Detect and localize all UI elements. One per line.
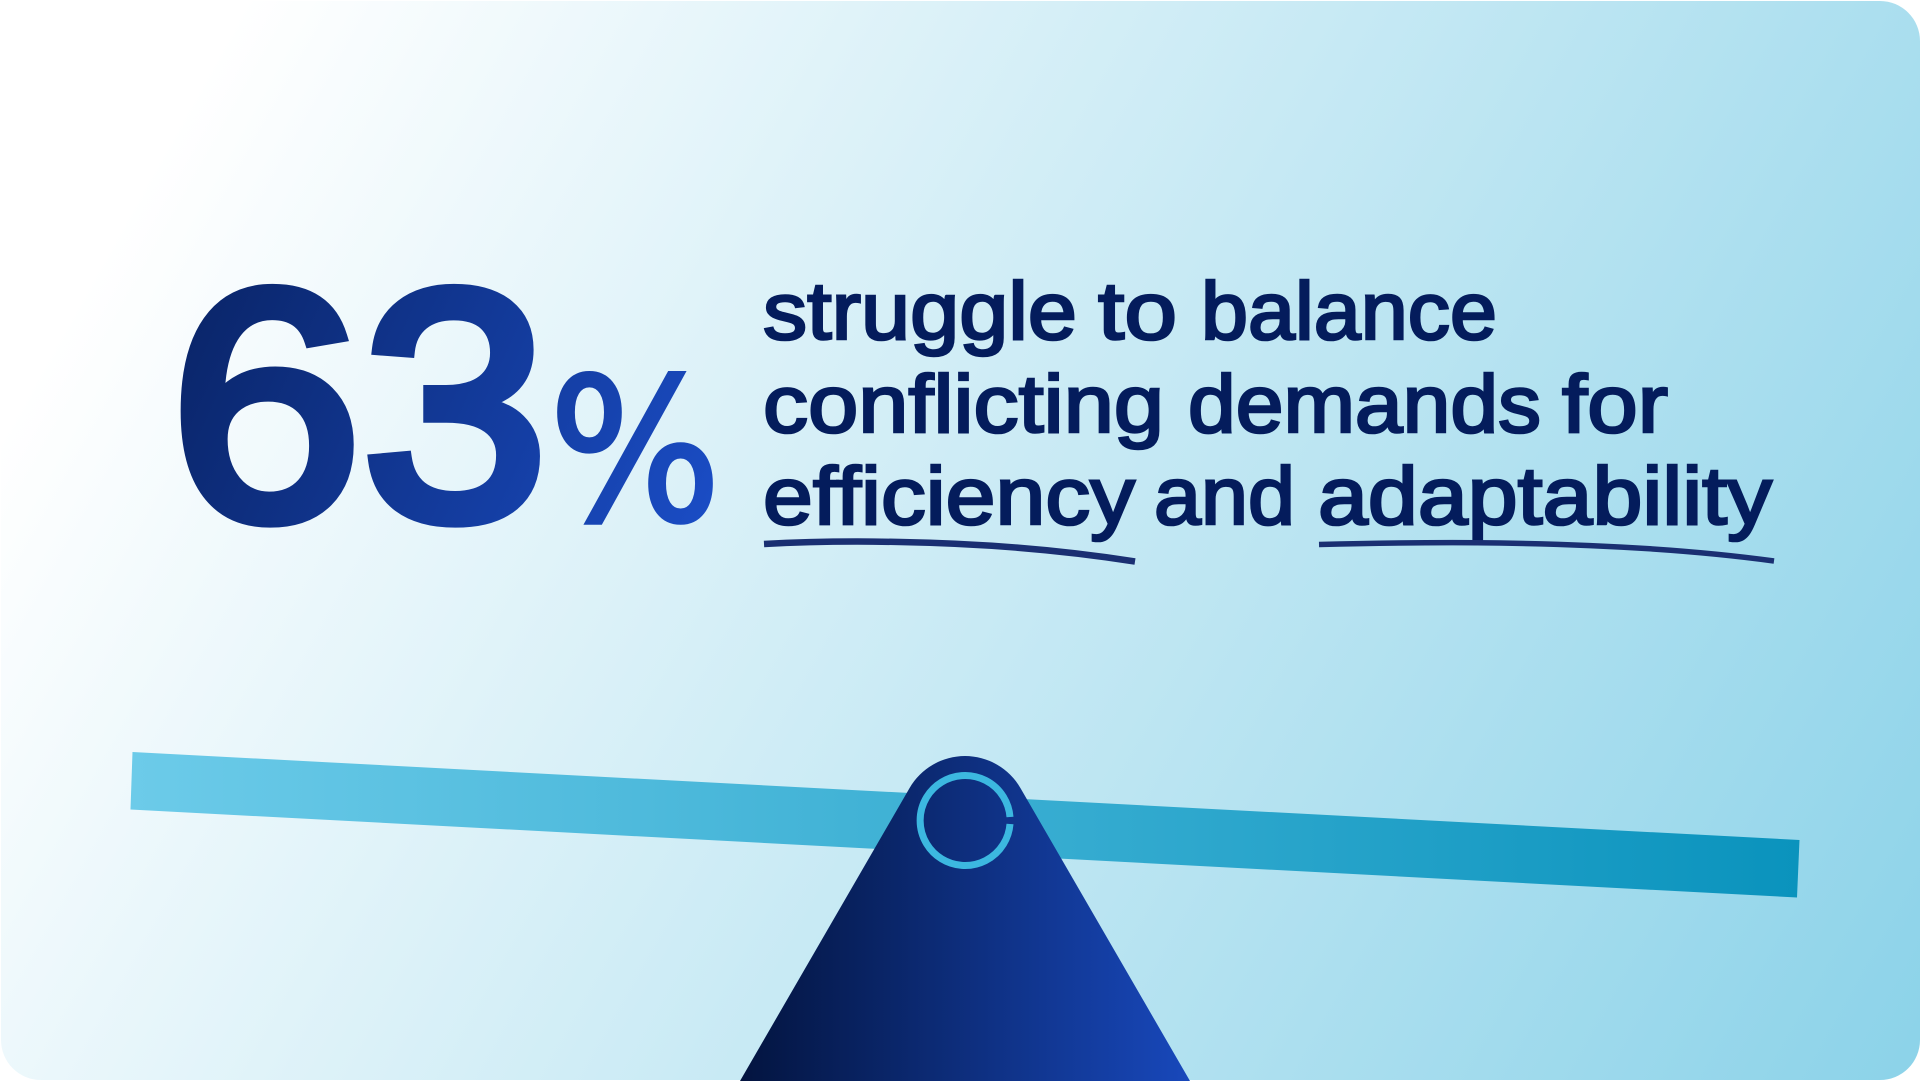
fulcrum: [740, 756, 1190, 1081]
headline text: efficiency: [763, 451, 1135, 542]
statistic: 63%: [170, 224, 721, 588]
seesaw: [130, 752, 1800, 1081]
headline text: and: [1154, 451, 1295, 542]
underline: efficiency: [764, 542, 1135, 562]
headline text: adaptability: [1318, 451, 1772, 542]
headline text: struggle: [763, 266, 1077, 357]
headline text: [763, 266, 1772, 542]
statistic: 63%: 3: [362, 224, 548, 588]
statistic: 63%: 6: [170, 224, 362, 588]
headline text: for: [1562, 359, 1668, 450]
statistic: 63%: %: [549, 336, 721, 567]
headline text: demands: [1188, 359, 1541, 450]
pivot ring: [920, 776, 1010, 866]
headline text: to: [1098, 266, 1177, 357]
headline text: balance: [1201, 266, 1497, 357]
seesaw beam: [130, 752, 1800, 898]
underline: adaptability: [1319, 543, 1774, 561]
headline text: conflicting: [763, 359, 1164, 450]
